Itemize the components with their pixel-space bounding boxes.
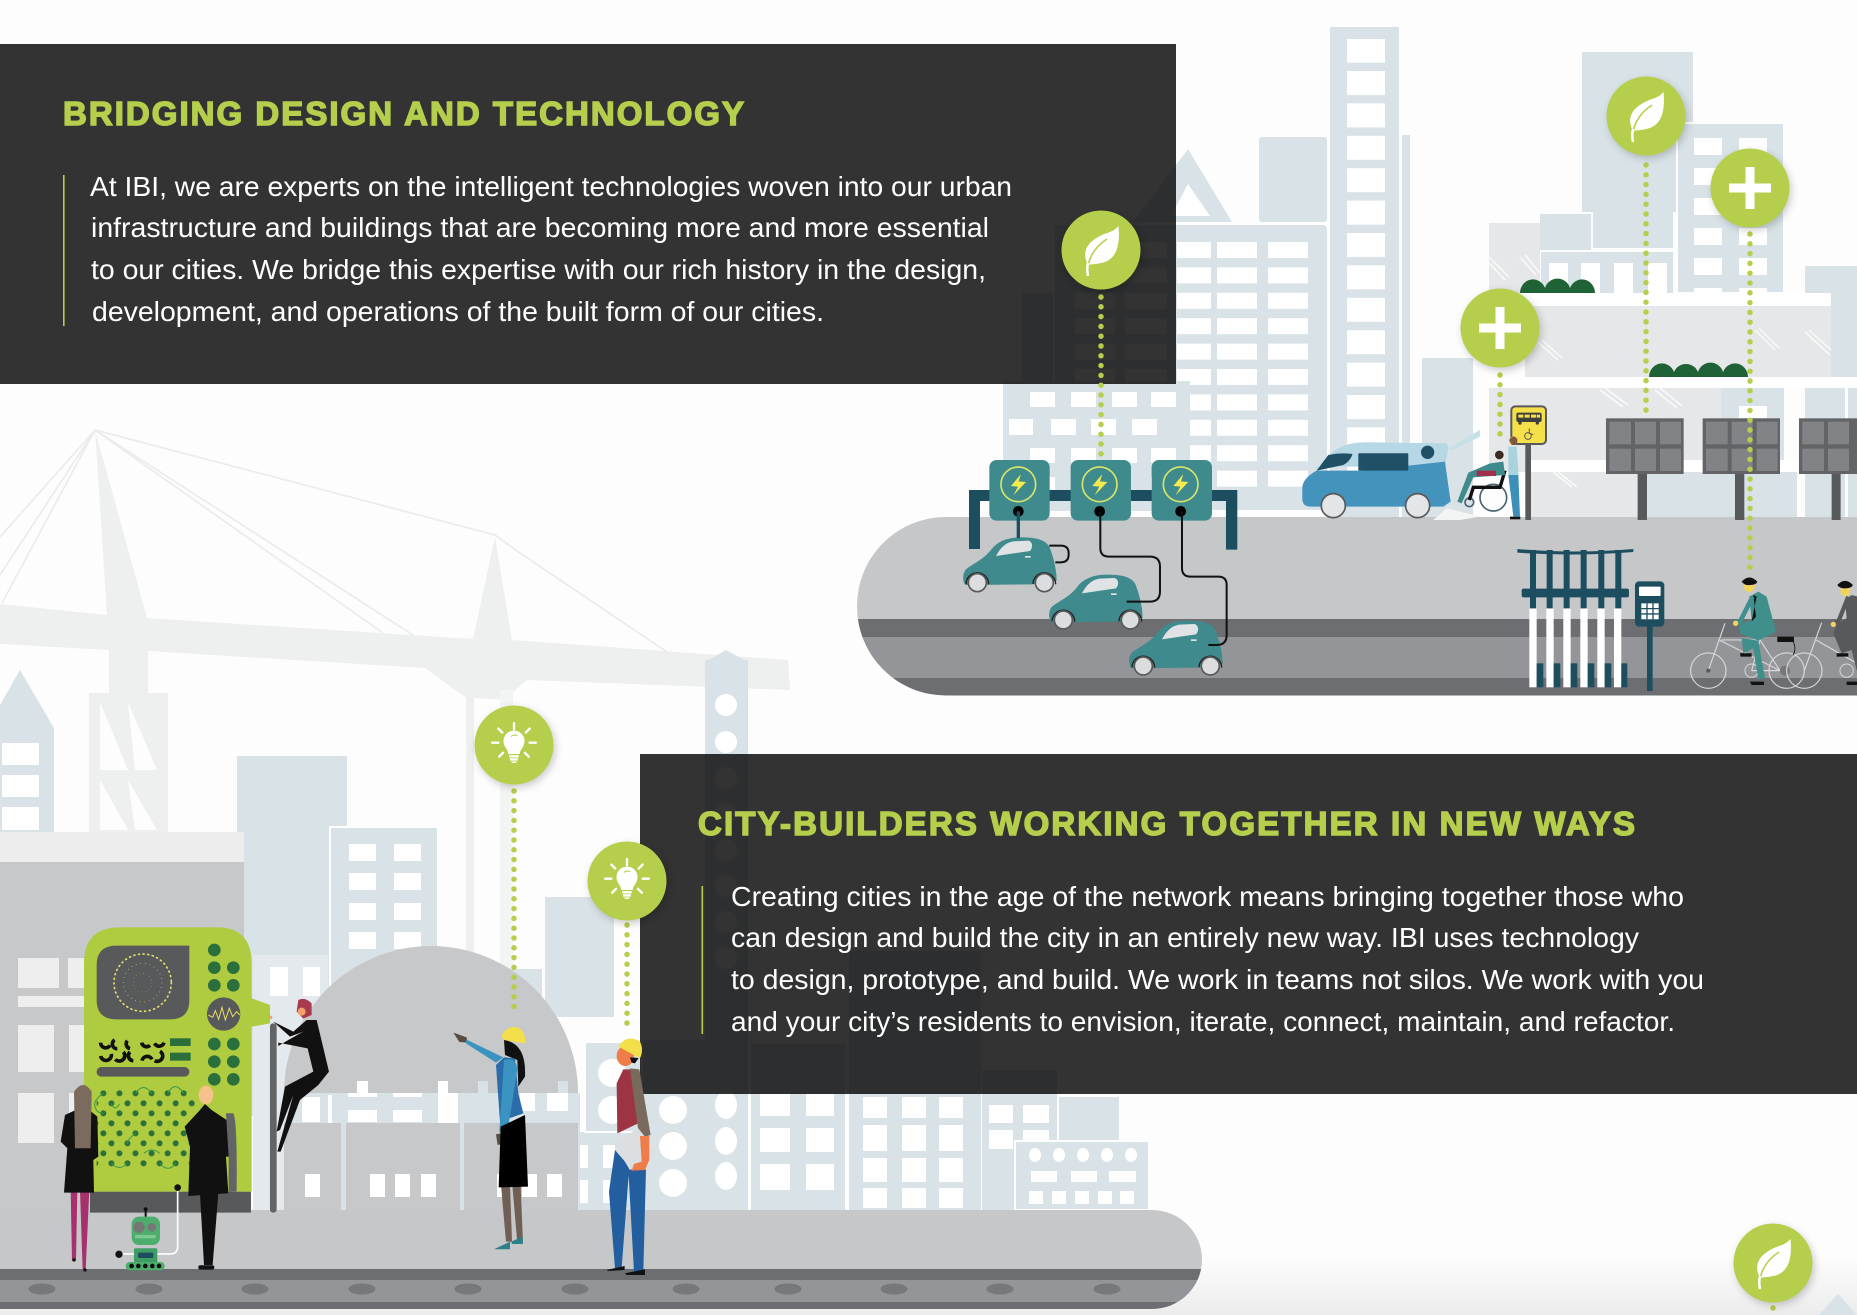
background: construction crane (0, 430, 790, 970)
dome and low grey buildings (284, 946, 580, 1213)
icon: plus upper right (1710, 148, 1790, 228)
cyclist one (1691, 577, 1804, 688)
icon: leaf upper right (1606, 76, 1686, 156)
bike rack (1517, 549, 1633, 687)
body text: can design and build the city in an entirely new way. IBI uses technology (731, 922, 1639, 953)
dotted connector lines (514, 165, 1773, 1315)
heading: bridging design and technology: BRIDGING DESIGN AND TECHNOLOGY (63, 95, 744, 132)
body text: and your city’s residents to envision, iterate, connect, maintain, and refactor. (731, 1006, 1675, 1037)
body text: At IBI, we are experts on the intelligent technologies woven into our urban (90, 171, 1012, 202)
background city: top right (1003, 27, 1857, 520)
accent rule (702, 886, 703, 1034)
panel: bridging design and technology (0, 44, 1176, 384)
solar panels (1606, 418, 1857, 520)
accessible van (1302, 430, 1480, 520)
bus stop sign (1511, 406, 1546, 520)
gauge (207, 997, 240, 1031)
road: upper street (850, 517, 1857, 696)
icon: plus near bus stop (1460, 288, 1540, 368)
dot grid (97, 1088, 195, 1170)
man with plans (607, 1038, 658, 1275)
icon: light bulb upper (474, 706, 554, 784)
background city: lower (0, 650, 1149, 1210)
large grey building, left (0, 832, 244, 1212)
cars (963, 537, 1223, 675)
charging cables (1018, 511, 1227, 645)
pedestrian pushing wheelchair (1457, 436, 1520, 519)
machine body (84, 927, 270, 1213)
street furniture, wheelchair user, bikes (1457, 406, 1857, 691)
woman in black coat (61, 1085, 98, 1272)
bushes (1520, 279, 1748, 377)
cyclist two (1787, 581, 1857, 688)
robot (115, 1184, 181, 1270)
icon: leaf on first panel (1062, 210, 1140, 290)
smart machine with visitors (61, 927, 329, 1272)
dials (101, 1040, 164, 1061)
panel: city-builders working together (640, 754, 1857, 1094)
body text: Creating cities in the age of the network means bringing together those who (731, 881, 1684, 912)
man and woman in hard hats (453, 1027, 658, 1275)
charging station boxes (989, 460, 1212, 521)
body text: to design, prototype, and build. We work in teams not silos. We work with you (731, 964, 1704, 995)
charging gantry (969, 490, 1237, 550)
indicator lights (208, 944, 240, 1086)
body text: infrastructure and buildings that are becoming more and more essential (91, 212, 989, 243)
icon: light bulb lower (588, 842, 666, 920)
man in black coat (185, 1086, 237, 1270)
body text: to our cities. We bridge this expertise with our rich history in the design, (91, 254, 986, 285)
heading: city-builders working together in new ways: CITY-BUILDERS WORKING TOGETHER IN NEW WAYS (698, 805, 1635, 842)
ev charging cars and stations (963, 460, 1237, 675)
body text: development, and operations of the built form of our cities. (92, 296, 824, 327)
body text (90, 171, 1012, 327)
screen with network (97, 946, 189, 1019)
icon: leaf bottom right (1734, 1224, 1812, 1302)
woman pointing (453, 1027, 528, 1249)
rooftop peeking at bottom right (1819, 1294, 1857, 1315)
road: lower street (0, 1210, 1210, 1310)
accent rule (63, 175, 65, 326)
pay kiosk (1635, 581, 1664, 691)
climbing person and pole (269, 999, 329, 1213)
body text (731, 881, 1704, 1037)
